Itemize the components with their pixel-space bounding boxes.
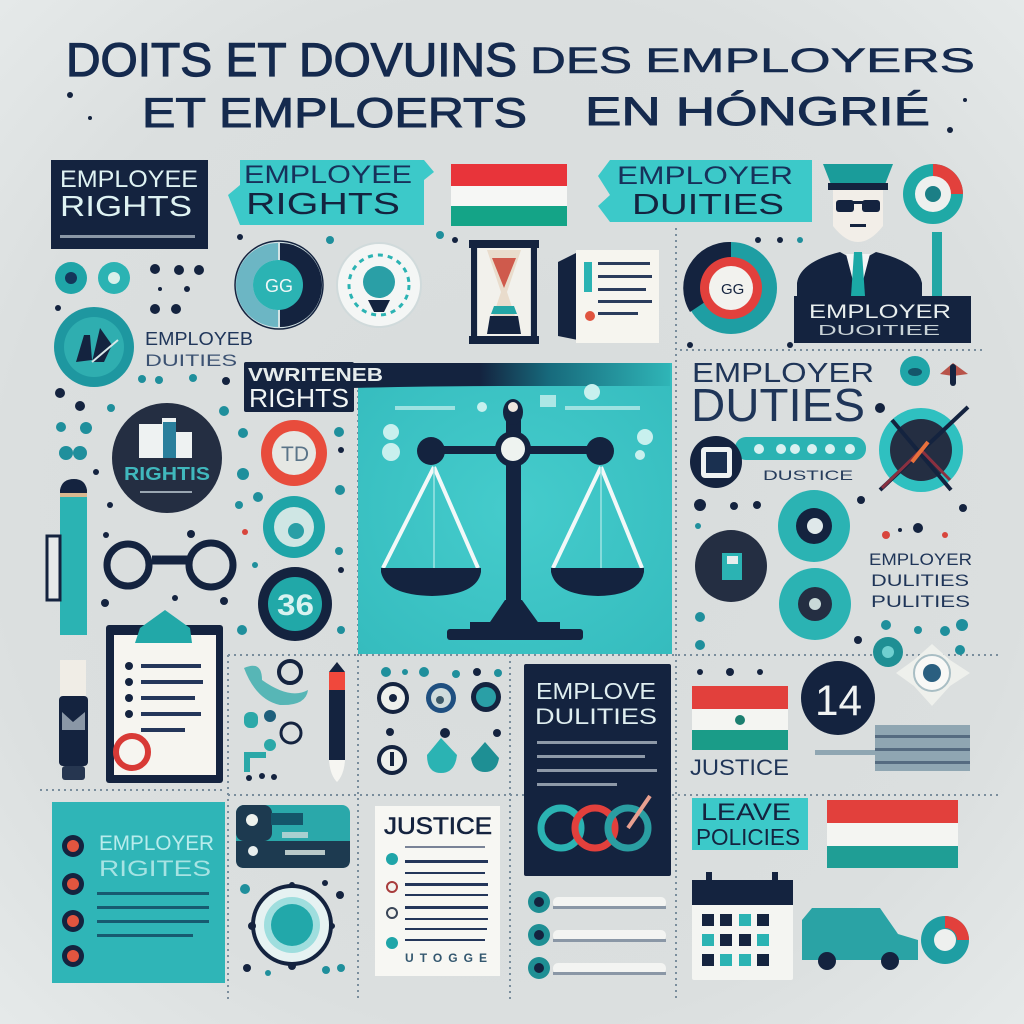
panel: employer duties heading right: DUTIES (691, 379, 865, 431)
icon: balance scale (381, 399, 644, 640)
icon: red ring: TD (281, 443, 309, 466)
icon: teal and navy pie (235, 241, 323, 329)
icon: number badge 14 (801, 661, 875, 735)
text: employer duties polities: DULITIES (871, 571, 969, 590)
title: DOITS ET DOVUINS (66, 33, 517, 86)
text: justice: JUSTICE (690, 755, 789, 780)
panel: employee duties dark card (524, 664, 671, 876)
icon: dark circle right (695, 530, 767, 602)
panel: employee duties dark card: DULITIES (535, 704, 657, 729)
panel: justice checklist card: UTOGGE (405, 951, 487, 965)
label: justice teal pill: DUSTICE (763, 467, 853, 483)
icon: pen with red tip (329, 662, 345, 782)
icon: hourglass frame (469, 240, 539, 344)
banner: employer duties teal (598, 160, 812, 222)
panel: employer rights teal card: RIGITES (99, 856, 211, 881)
icon: calendar (692, 872, 793, 980)
text: employer duties polities: PULITIES (871, 592, 970, 611)
list: three progress rows (528, 891, 666, 979)
icon: gear badge (896, 644, 970, 706)
text: employee duties left (145, 329, 253, 370)
panel: justice checklist card: JUSTICE (384, 813, 492, 840)
icon: pen (47, 479, 87, 635)
icon: gear circle (337, 243, 421, 327)
label: written rights (244, 362, 383, 413)
icon: Hungarian flag bottom (827, 800, 958, 868)
icon: list bars right (815, 725, 970, 771)
text: employee duties left: DUITIES (145, 351, 237, 370)
banner: employer duties teal: DUITIES (632, 189, 784, 221)
panel: justice checklist card (375, 806, 500, 976)
icon: teal car (802, 908, 918, 970)
icon: teal figure cluster (244, 661, 308, 772)
icon: teal circle number (778, 490, 850, 562)
icon: navy number badge: 36 (277, 589, 314, 622)
icon: large teal donut top right column: GG (721, 281, 744, 298)
banner: employee rights teal (228, 160, 434, 225)
panel: employer duties heading right (691, 357, 874, 431)
icon: red and teal ring top right (903, 164, 963, 296)
text: employee duties left: EMPLOYEB (145, 329, 253, 349)
panel: employer rights teal card (52, 802, 225, 983)
title (66, 33, 975, 136)
label: employer duties navy: DUOITIEE (818, 322, 940, 339)
title: ET EMPLOERTS (142, 89, 527, 136)
label: written rights: RIGHTS (249, 383, 349, 413)
panel: employee rights navy label: RIGHTS (60, 191, 192, 223)
icon: large teal donut top right column (683, 242, 777, 334)
icon: dark circle rights (112, 403, 222, 513)
icon: Hungarian flag top (451, 164, 567, 226)
banner: employee rights teal: RIGHTS (246, 186, 400, 221)
banner: leave policies: POLICIES (696, 824, 800, 850)
panel: employer rights teal card: EMPLOYER (99, 832, 214, 855)
card: small teal and navy dashboard (236, 805, 350, 868)
label: employer duties navy: EMPLOYER (809, 302, 951, 323)
icon: red teal ring bottom right (921, 916, 969, 964)
icon: teal circle lower (779, 568, 851, 640)
title: DES (530, 40, 632, 81)
panel: employee rights navy label: EMPLOYEE (60, 166, 198, 193)
icon: compass (879, 407, 968, 492)
icon: large teal seal (54, 307, 134, 387)
icon: navy number badge (258, 567, 332, 641)
icon: employer figure in uniform (797, 164, 922, 320)
icon: glasses (107, 543, 233, 587)
icon: teal and navy pie: GG (265, 276, 293, 296)
banner: leave policies (692, 798, 808, 850)
icon: flag mid right (692, 686, 788, 750)
icon: small teal badge (873, 637, 903, 667)
icon: red ring (261, 420, 327, 486)
icon: teal ring (263, 496, 325, 558)
icon: document with lines (558, 250, 659, 343)
label: written rights: VWRITENEB (248, 365, 383, 385)
banner: employee rights teal: EMPLOYEE (244, 161, 412, 189)
banner: employer duties teal: EMPLOYER (617, 162, 793, 190)
icons: small teal dots (55, 262, 130, 294)
text: employer duties polities: EMPLOYER (869, 550, 972, 569)
label: employer duties navy (794, 296, 971, 343)
icon: number badge 14: 14 (815, 677, 862, 725)
icon: small icons right of heading (900, 356, 968, 386)
icon: dark circle rights: RIGHTIS (124, 464, 210, 484)
panel: employee rights navy label (51, 160, 208, 249)
label: justice teal pill (690, 436, 866, 488)
title: EN HÓNGRIÉ (585, 89, 930, 134)
title: EMPLOYERS (645, 42, 975, 80)
text: employer duties polities (869, 550, 972, 611)
banner: leave policies: LEAVE (701, 799, 791, 826)
panel: employer duties heading right: EMPLOYER (692, 357, 874, 388)
panel: employee duties dark card: EMPLOVE (536, 678, 656, 704)
panel: central justice scale (352, 363, 672, 654)
icon: marker left (59, 660, 88, 780)
icon: clipboard checklist (106, 610, 223, 783)
icon: large lens (248, 882, 335, 970)
icons: ring and drop row (377, 682, 501, 775)
